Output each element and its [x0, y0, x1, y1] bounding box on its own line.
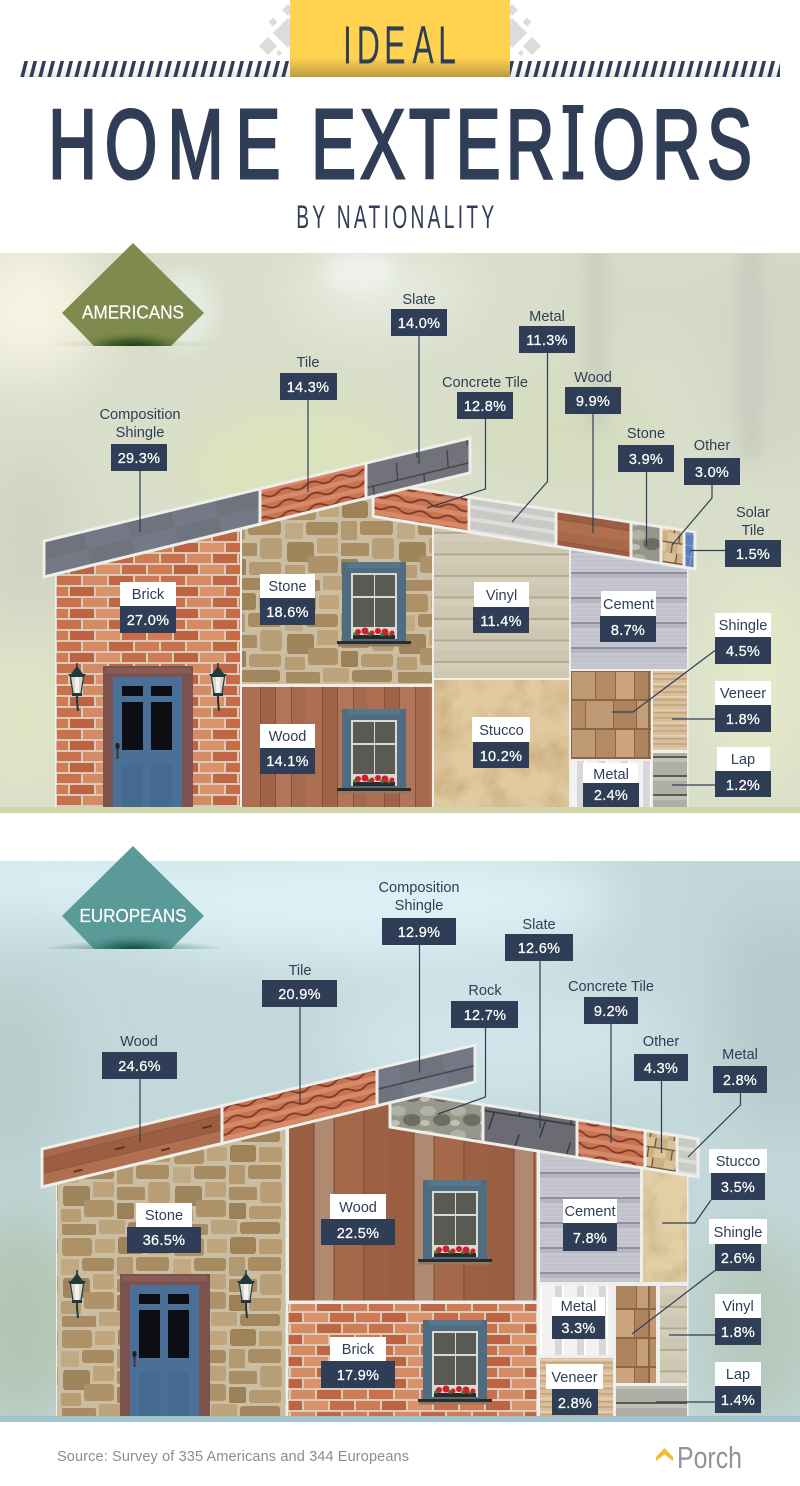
- label: roof stone: 3.9%: [629, 452, 663, 468]
- label: roof concrete tile: Concrete Tile: [568, 979, 654, 995]
- label: roof stone: Stone: [627, 426, 665, 442]
- label: wall stucco: Stucco: [479, 723, 524, 739]
- label: roof wood: Wood: [120, 1034, 158, 1050]
- label: wall veneer: [546, 1364, 603, 1415]
- window upper: [337, 562, 411, 646]
- label: roof solar tile: Tile: [742, 523, 764, 539]
- label: roof rock: Rock: [468, 983, 502, 999]
- label: roof solar tile: [690, 505, 781, 567]
- label: wall stone: 18.6%: [266, 605, 309, 621]
- label: wall brick: 17.9%: [337, 1368, 379, 1384]
- logo: Porch: Porch: [677, 1440, 742, 1475]
- label: wall veneer: 1.8%: [726, 712, 760, 728]
- label: wall shingle: 2.6%: [721, 1251, 755, 1267]
- panel: Americans: [0, 230, 800, 813]
- label: roof tile: 14.3%: [287, 380, 329, 396]
- label: wall metal: 2.4%: [594, 788, 628, 804]
- label: wall stucco: 3.5%: [721, 1180, 755, 1196]
- label: roof solar tile: 1.5%: [736, 547, 770, 563]
- label: roof wood: [565, 370, 621, 533]
- label: roof concrete tile: 9.2%: [594, 1004, 628, 1020]
- label: roof concrete tile: Concrete Tile: [442, 375, 528, 391]
- label: wall vinyl: [473, 582, 529, 633]
- label: roof tile: Tile: [297, 355, 319, 371]
- label: wall lap: [672, 747, 771, 797]
- label: roof metal: 11.3%: [526, 333, 568, 349]
- label: roof slate: [505, 917, 573, 1128]
- label: roof concrete tile: [427, 375, 528, 508]
- header tab: IDEAL: [290, 0, 510, 77]
- label: wall wood: Wood: [269, 729, 306, 745]
- label: roof concrete tile: [568, 979, 654, 1143]
- logo: Porch: [656, 1440, 742, 1475]
- label: roof rock: [438, 983, 518, 1114]
- lantern left: [68, 663, 86, 711]
- label: wall stone: Stone: [145, 1208, 183, 1224]
- badge: Americans: AMERICANS: [82, 302, 184, 322]
- label: wall wood: 14.1%: [266, 754, 309, 770]
- label: wall veneer: Veneer: [551, 1370, 598, 1386]
- label: wall lap: [656, 1362, 761, 1413]
- badge: Americans: [62, 243, 204, 346]
- label: roof composition shingle: Composition: [378, 880, 460, 896]
- label: roof tile: 20.9%: [278, 987, 321, 1003]
- label: wall shingle: [612, 613, 771, 712]
- label: wall stucco: [472, 717, 530, 768]
- label: roof composition shingle: [99, 407, 181, 532]
- label: wall brick: 27.0%: [127, 613, 169, 629]
- label: roof slate: 12.6%: [518, 941, 560, 957]
- label: roof other: 3.0%: [695, 465, 729, 481]
- ground strip: [0, 1416, 800, 1422]
- badge: Europeans: EUROPEANS: [80, 906, 186, 926]
- label: roof slate: [391, 292, 447, 464]
- label: roof composition shingle: 29.3%: [118, 451, 160, 467]
- label: wall metal: Metal: [593, 767, 629, 783]
- label: roof metal: Metal: [529, 309, 565, 325]
- label: roof composition shingle: Composition: [99, 407, 181, 423]
- label: roof slate: 14.0%: [398, 316, 440, 332]
- right roof segments: [390, 1095, 698, 1177]
- label: roof concrete tile: 12.8%: [464, 399, 506, 415]
- label: roof solar tile: Solar: [736, 505, 770, 521]
- label: roof slate: Slate: [402, 292, 436, 308]
- left roof segments: [42, 1045, 475, 1187]
- label: wall lap: Lap: [731, 752, 755, 768]
- label: wall metal: 3.3%: [561, 1321, 596, 1337]
- blurred background: Americans: [0, 230, 800, 813]
- label: wall metal: [552, 1297, 605, 1339]
- label: wall stone: 36.5%: [143, 1233, 185, 1249]
- blurred background: Europeans: [0, 840, 800, 1430]
- subtitle: BY NATIONALITY: BY NATIONALITY: [296, 199, 494, 235]
- label: roof tile: Tile: [289, 963, 311, 979]
- label: wall lap: 1.4%: [721, 1393, 755, 1409]
- label: wall shingle: Shingle: [719, 618, 767, 634]
- window lower: [418, 1320, 492, 1404]
- label: wall veneer: [672, 681, 771, 732]
- label: roof metal: Metal: [722, 1047, 758, 1063]
- label: wall cement: [600, 591, 656, 642]
- door: [103, 666, 193, 808]
- label: wall stone: [260, 574, 315, 625]
- label: wall stucco: Stucco: [716, 1154, 760, 1170]
- walls: [50, 480, 695, 810]
- label: wall wood: 22.5%: [337, 1226, 379, 1242]
- header striped rule: [20, 61, 780, 77]
- label: wall lap: 1.2%: [726, 778, 760, 794]
- label: wall brick: [321, 1337, 395, 1388]
- label: roof metal: [512, 309, 575, 522]
- label: wall cement: [563, 1199, 617, 1251]
- label: roof metal: 2.8%: [723, 1073, 757, 1089]
- label: wall vinyl: Vinyl: [486, 588, 517, 604]
- label: roof wood: [102, 1034, 177, 1142]
- label: wall stucco: 10.2%: [480, 749, 522, 765]
- label: wall cement: Cement: [564, 1204, 616, 1220]
- label: roof other: [672, 438, 740, 545]
- lantern right: [209, 663, 227, 711]
- left roof segments: [44, 438, 470, 577]
- panel: Europeans: [0, 840, 800, 1430]
- label: wall cement: 7.8%: [573, 1231, 607, 1247]
- label: roof other: [634, 1034, 688, 1153]
- label: wall veneer: 2.8%: [558, 1396, 592, 1412]
- label: wall vinyl: 1.8%: [721, 1325, 755, 1341]
- label: roof composition shingle: Shingle: [395, 898, 443, 914]
- walls: [50, 1090, 695, 1420]
- label: wall metal: Metal: [561, 1299, 596, 1315]
- label: wall wood: [321, 1194, 395, 1245]
- label: wall brick: [120, 582, 176, 633]
- label: wall vinyl: [669, 1294, 761, 1345]
- label: wall cement: 8.7%: [611, 623, 645, 639]
- label: roof rock: 12.7%: [464, 1008, 506, 1024]
- label: roof other: Other: [694, 438, 730, 454]
- header tab: IDEAL: IDEAL: [343, 16, 456, 75]
- label: roof slate: Slate: [522, 917, 556, 933]
- label: wall wood: Wood: [339, 1200, 377, 1216]
- label: wall lap: Lap: [726, 1367, 750, 1383]
- label: wall wood: [260, 724, 315, 774]
- label: roof stone: [618, 426, 674, 546]
- label: wall stone: [127, 1203, 201, 1253]
- label: wall stone: Stone: [268, 579, 307, 595]
- label: roof composition shingle: Shingle: [116, 425, 164, 441]
- label: roof tile: [280, 355, 337, 492]
- label: roof wood: 9.9%: [576, 394, 610, 410]
- label: roof composition shingle: [378, 880, 460, 1073]
- door: [120, 1274, 210, 1416]
- lantern right: [237, 1270, 255, 1318]
- label: roof tile: [262, 963, 337, 1103]
- badge: Europeans: [48, 846, 218, 949]
- label: roof other: Other: [643, 1034, 679, 1050]
- label: wall brick: Brick: [342, 1342, 375, 1358]
- source note: Source: Survey of 335 Americans and 344 Europeans: [57, 1449, 409, 1465]
- label: wall shingle: Shingle: [714, 1225, 762, 1241]
- lantern left: [68, 1270, 86, 1318]
- window upper: [418, 1180, 492, 1264]
- title: HOME EXTERIORS: HOME EXTERIORS: [48, 89, 752, 199]
- house: Europeans: [42, 1045, 698, 1420]
- label: roof wood: Wood: [574, 370, 612, 386]
- right roof segments: [373, 488, 695, 569]
- label: roof other: 4.3%: [644, 1061, 678, 1077]
- label: wall shingle: [632, 1219, 767, 1334]
- label: wall brick: Brick: [132, 587, 165, 603]
- label: wall veneer: Veneer: [720, 686, 766, 702]
- label: wall vinyl: 11.4%: [480, 614, 522, 630]
- label: roof wood: 24.6%: [118, 1059, 161, 1075]
- label: wall cement: Cement: [603, 597, 654, 613]
- label: roof composition shingle: 12.9%: [398, 925, 440, 941]
- label: wall metal: [583, 763, 639, 807]
- label: wall vinyl: Vinyl: [722, 1299, 754, 1315]
- house: Americans: [44, 438, 695, 810]
- window lower: [337, 709, 411, 794]
- header ornament: grey diamonds: [259, 4, 541, 56]
- ground strip: [0, 807, 800, 813]
- label: roof metal: [688, 1047, 767, 1157]
- label: wall shingle: 4.5%: [726, 644, 760, 660]
- label: wall stucco: [662, 1149, 767, 1223]
